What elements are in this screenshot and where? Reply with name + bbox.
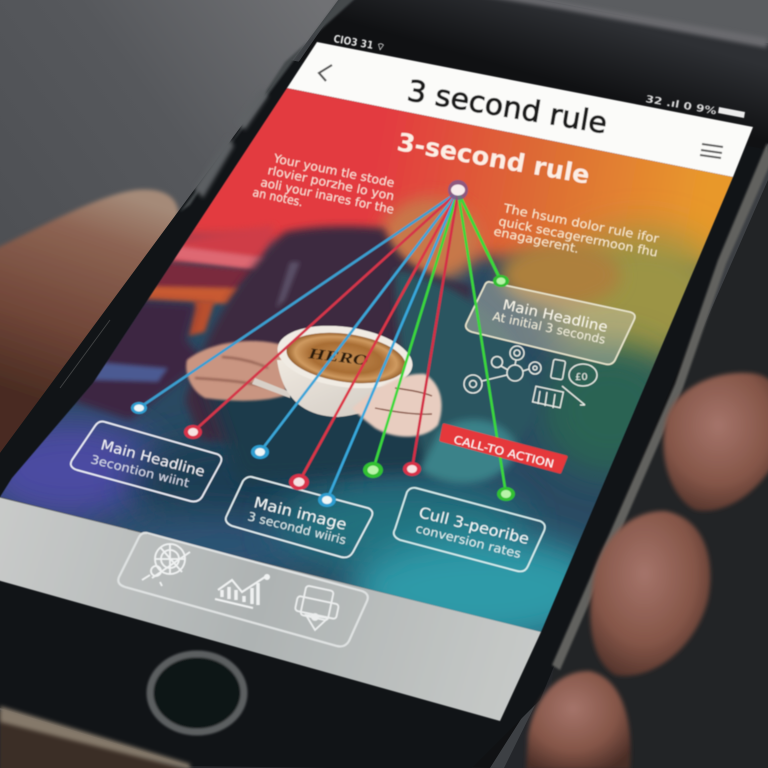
callout box: main headline left	[71, 422, 221, 502]
photo: sweater right	[392, 268, 527, 460]
hand shape	[186, 341, 286, 401]
callout box: main image: 3 secondd wiiris	[246, 509, 348, 547]
phone right edge	[552, 143, 768, 670]
photo: right hand	[352, 374, 442, 437]
photo: orange chair leg	[188, 300, 215, 336]
hand: right upper finger	[663, 373, 768, 511]
hand: palm at bottom	[0, 712, 195, 768]
hand: right middle finger	[590, 511, 710, 676]
content area gradient	[0, 87, 734, 632]
hub dot	[448, 180, 468, 200]
colour field: purple	[0, 420, 160, 520]
photo: sweater lower shade	[203, 396, 424, 482]
callout box: main headline upper	[466, 282, 635, 364]
app header bar	[287, 42, 753, 177]
hamburger menu	[700, 144, 723, 158]
cup handle	[252, 378, 290, 398]
thin edge highlight	[60, 320, 110, 388]
background: blurred table left	[0, 0, 345, 270]
call-to-action button	[441, 425, 566, 472]
photo: backdrop red wall	[160, 225, 275, 262]
colour field: deep teal	[275, 480, 525, 570]
left paragraph: aoli your inares for the	[259, 175, 395, 217]
callout box: main image: Main image	[252, 493, 349, 534]
callout box: main headline left: Main Headline	[99, 437, 206, 481]
connector lines from hub	[139, 192, 506, 500]
finger creases	[375, 388, 432, 414]
status text left: CIO3 31 ⌔	[332, 33, 386, 54]
right paragraph	[492, 201, 660, 260]
app title: 3 second rule	[405, 73, 610, 140]
callout box: main headline upper: Main Headline	[501, 297, 609, 336]
photo: sweater fold	[276, 262, 300, 308]
photo: right blurred wall	[500, 243, 620, 307]
call-to-action button: CALL-TO ACTION	[452, 433, 555, 471]
icon cluster: network diagram: £0	[575, 372, 588, 383]
colour field: mid blue	[134, 501, 295, 568]
right paragraph: enagagerent.	[492, 224, 580, 256]
phone lower metal strip	[0, 706, 190, 768]
photo: head glow	[380, 198, 480, 282]
callout box: main headline left: 3econtion wiint	[89, 452, 191, 490]
background: top right surface	[460, 0, 768, 46]
icon: printer badge	[295, 585, 339, 630]
icon panel	[118, 533, 368, 646]
left paragraph: an notes.	[251, 185, 304, 209]
battery icon	[718, 107, 745, 118]
photo: dark left area	[70, 300, 205, 420]
photo: sweater cuff	[420, 420, 518, 483]
left paragraph	[251, 151, 396, 217]
phone top edge highlight	[460, 0, 767, 48]
back chevron	[319, 65, 332, 81]
colour field: top band	[186, 88, 734, 271]
cup body	[276, 359, 386, 418]
cup rim	[276, 325, 414, 388]
icon: compass	[142, 544, 190, 586]
photo: pink band	[166, 246, 268, 272]
finger creases	[195, 357, 270, 388]
callout box: conversion rates: conversion rates	[414, 521, 522, 561]
hand: right lower finger	[526, 671, 631, 768]
photo: left hand	[186, 341, 286, 401]
right paragraph: quick secagerermoon fhu	[497, 214, 659, 260]
colour field: navy	[113, 434, 332, 516]
callout box: main headline upper: At initial 3 seconds	[491, 309, 607, 347]
colour field: olive right	[550, 230, 730, 370]
colour field: teal	[350, 535, 610, 645]
heading: 3-second rule	[395, 127, 592, 190]
coffee label: HERO	[306, 346, 369, 369]
endpoint dots	[131, 275, 515, 507]
coffee	[286, 332, 406, 384]
colour field: green right	[540, 345, 680, 475]
callout box: conversion rates	[394, 488, 545, 571]
hand: left thumb	[0, 190, 179, 480]
gray footer	[0, 495, 541, 721]
icon cluster: network diagram	[464, 346, 597, 408]
photo: maroon block	[156, 262, 253, 290]
photo: orange chair top	[138, 286, 240, 304]
photo: sweater	[185, 226, 470, 460]
left paragraph: rlovier porzhe lo yon	[266, 163, 396, 203]
side button lower	[194, 136, 234, 198]
side button upper	[236, 88, 268, 130]
callout box: conversion rates: Cull 3-peoribe	[417, 503, 531, 548]
callout box: main image	[226, 477, 372, 557]
right paragraph: The hsum dolor rule ifor	[501, 201, 660, 246]
icon: bar chart	[215, 575, 269, 608]
status icons right: 32 .ıl 0 9%	[644, 94, 717, 117]
home button	[150, 654, 244, 732]
left paragraph: Your youm tle stode	[271, 151, 396, 190]
phone left frame	[180, 0, 358, 212]
hand shape	[352, 374, 442, 437]
cup	[252, 318, 417, 417]
background: right surface	[540, 143, 768, 768]
photo: blue strip	[88, 362, 168, 382]
